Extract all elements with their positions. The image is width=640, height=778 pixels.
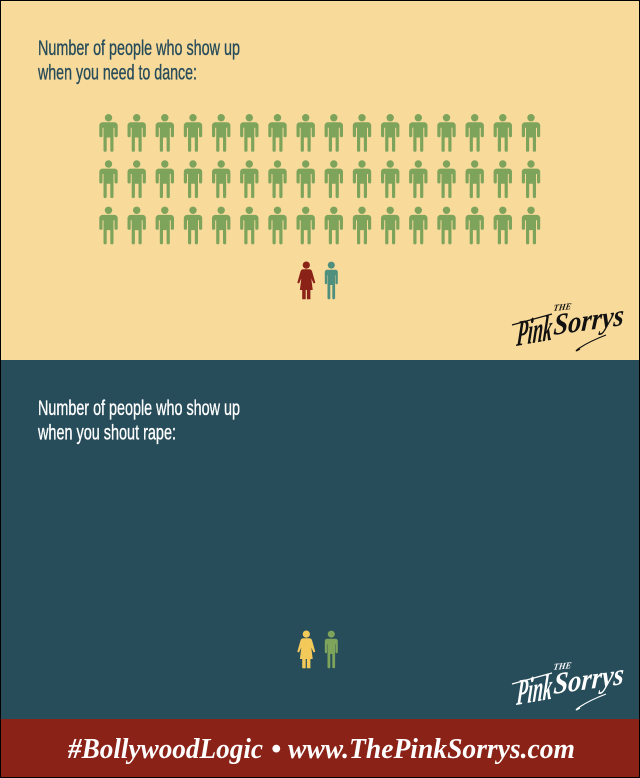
heading: dance: Number of people who show up	[38, 37, 240, 60]
footer text: www.ThePinkSorrys.com	[288, 733, 575, 765]
logo: The Pink Sorrys, dark	[512, 298, 625, 354]
heading: dance: when you need to dance:	[37, 62, 197, 84]
panel: rape	[0, 360, 640, 719]
footer text: •	[271, 733, 281, 765]
logo: The Pink Sorrys, dark: Pink	[515, 306, 554, 354]
logo: The Pink Sorrys, light: THE	[553, 660, 572, 672]
icon: man, rape panel	[325, 631, 338, 668]
logo: The Pink Sorrys, light: Sorrys	[553, 657, 625, 701]
logo: The Pink Sorrys, light	[512, 657, 625, 713]
logo: The Pink Sorrys, dark: THE	[553, 301, 572, 313]
footer text: #BollywoodLogic	[67, 733, 263, 765]
heading: rape: when you shout rape:	[37, 422, 176, 444]
icon: man, dance panel	[325, 262, 338, 299]
heading: rape: Number of people who show up	[38, 397, 240, 420]
heading: dance	[37, 37, 240, 84]
heading: rape	[37, 397, 240, 444]
footer text	[67, 733, 575, 765]
icon: woman, dance panel	[297, 262, 315, 299]
icon: woman, rape panel	[297, 630, 315, 668]
logo: The Pink Sorrys, dark: Sorrys	[553, 298, 625, 342]
logo: The Pink Sorrys, light: Pink	[515, 665, 554, 713]
pictogram: crowd of 48 dancers	[99, 114, 540, 244]
footer banner	[0, 719, 640, 778]
panel: dance	[0, 0, 640, 360]
